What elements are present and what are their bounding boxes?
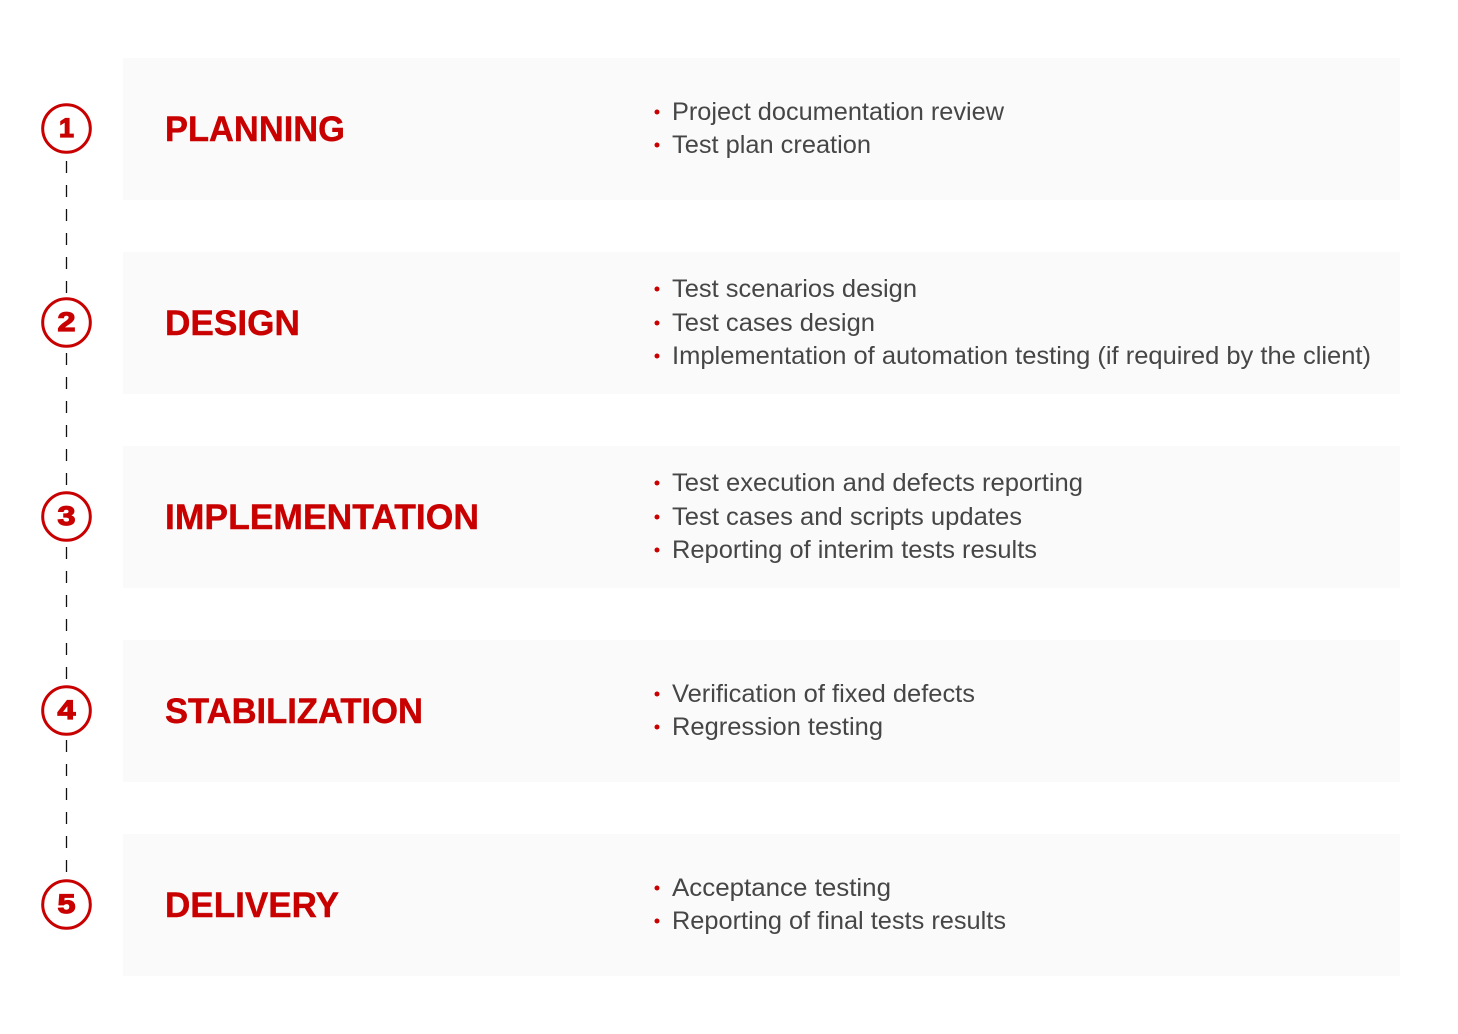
panel: stabilization [123, 640, 1400, 782]
list: delivery tasks: Acceptance testing [672, 874, 891, 902]
list: design tasks: Implementation of automation testing (if required by the client) [672, 342, 1371, 370]
panel: design [123, 252, 1400, 394]
heading: delivery: DELIVERY [165, 886, 339, 925]
step marker 4 [43, 687, 90, 734]
heading: planning: PLANNING [165, 110, 345, 149]
list: delivery tasks [654, 874, 1006, 935]
step marker 1 [43, 105, 90, 152]
step marker 4: 4 [58, 695, 76, 725]
step marker 3: 3 [58, 501, 76, 531]
list: design tasks: Test cases design [672, 309, 875, 337]
panel: implementation [123, 446, 1400, 588]
step marker 5 [43, 881, 90, 928]
heading: design: DESIGN [165, 304, 300, 343]
list: stabilization tasks [654, 680, 975, 741]
list: delivery tasks: Reporting of final tests results [672, 907, 1006, 935]
panel: planning [123, 58, 1400, 200]
panel: delivery [123, 834, 1400, 976]
list: planning tasks [654, 98, 1005, 159]
list: stabilization tasks: Verification of fixed defects [672, 680, 975, 708]
list: implementation tasks: Reporting of interim tests results [672, 536, 1037, 564]
list: planning tasks: Test plan creation [672, 131, 871, 159]
list: planning tasks: Project documentation review [672, 98, 1005, 126]
list: implementation tasks [654, 469, 1083, 564]
step marker 2: 2 [58, 307, 76, 337]
step marker 1: 1 [59, 113, 74, 143]
heading: implementation: IMPLEMENTATION [165, 498, 479, 537]
heading: stabilization: STABILIZATION [165, 692, 423, 731]
step marker 5: 5 [58, 889, 76, 919]
step marker 3 [43, 493, 90, 540]
list: design tasks [654, 275, 1371, 370]
list: implementation tasks: Test cases and scripts updates [672, 503, 1022, 531]
list: implementation tasks: Test execution and defects reporting [672, 469, 1083, 497]
list: stabilization tasks: Regression testing [672, 713, 883, 741]
step marker 2 [43, 299, 90, 346]
list: design tasks: Test scenarios design [672, 275, 917, 303]
